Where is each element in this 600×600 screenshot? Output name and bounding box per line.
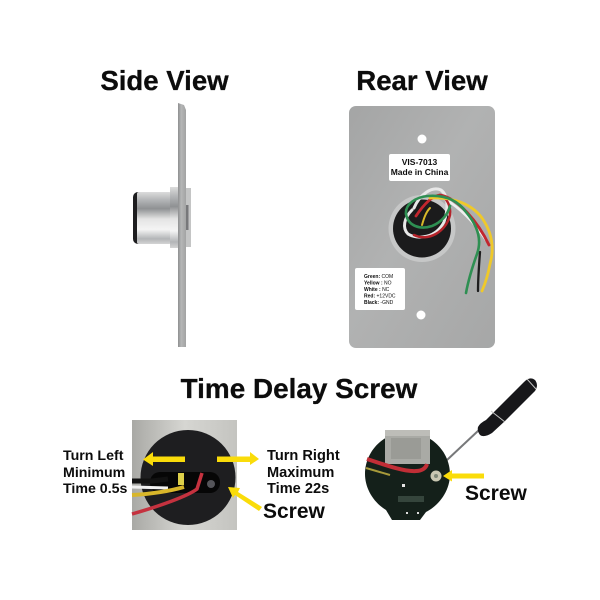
- label: wire legend: Green: COM: [364, 274, 393, 280]
- label: model: [389, 154, 450, 181]
- photo: time delay screw on button back: [132, 420, 237, 530]
- label: wire legend: Black: -GND: [364, 300, 394, 306]
- text: turn left: [63, 448, 128, 497]
- label: wire legend: White : NC: [364, 287, 390, 293]
- label: wire legend: Red: +12VDC: [364, 294, 396, 300]
- text: turn left: Minimum: [63, 465, 125, 481]
- text: screw label left: Screw: [263, 500, 326, 523]
- text: turn right: Time 22s: [267, 481, 329, 497]
- heading: Rear View: Rear View: [356, 65, 488, 96]
- label: model: VIS-7013: [402, 157, 437, 167]
- photo: circuit board: [365, 430, 450, 520]
- text: turn right: Maximum: [267, 465, 334, 481]
- arrow: turn right: [217, 452, 259, 465]
- text: turn right: [267, 448, 340, 497]
- mounting hole top: [418, 134, 426, 144]
- button back with ring: [388, 195, 456, 262]
- arrow: turn left: [143, 452, 185, 466]
- arrow: to screw: [228, 487, 262, 511]
- wires: [405, 189, 492, 293]
- text: turn right: Turn Right: [267, 448, 340, 464]
- text: screw label right: Screw: [465, 482, 528, 505]
- text: turn left: Turn Left: [63, 448, 124, 464]
- label: wire legend: [355, 268, 405, 310]
- photo: side view of button: [133, 103, 191, 347]
- heading: Side View: Side View: [100, 65, 229, 96]
- label: wire legend: Yellow : NO: [364, 280, 392, 286]
- label: model: Made in China: [391, 167, 449, 177]
- arrow: to screw on board: [443, 470, 484, 482]
- mounting hole bottom: [416, 310, 426, 320]
- screwdriver: [447, 378, 537, 460]
- photo: rear view plate: [349, 106, 495, 348]
- text: turn left: Time 0.5s: [63, 481, 128, 497]
- heading: Time Delay Screw: Time Delay Screw: [181, 373, 418, 404]
